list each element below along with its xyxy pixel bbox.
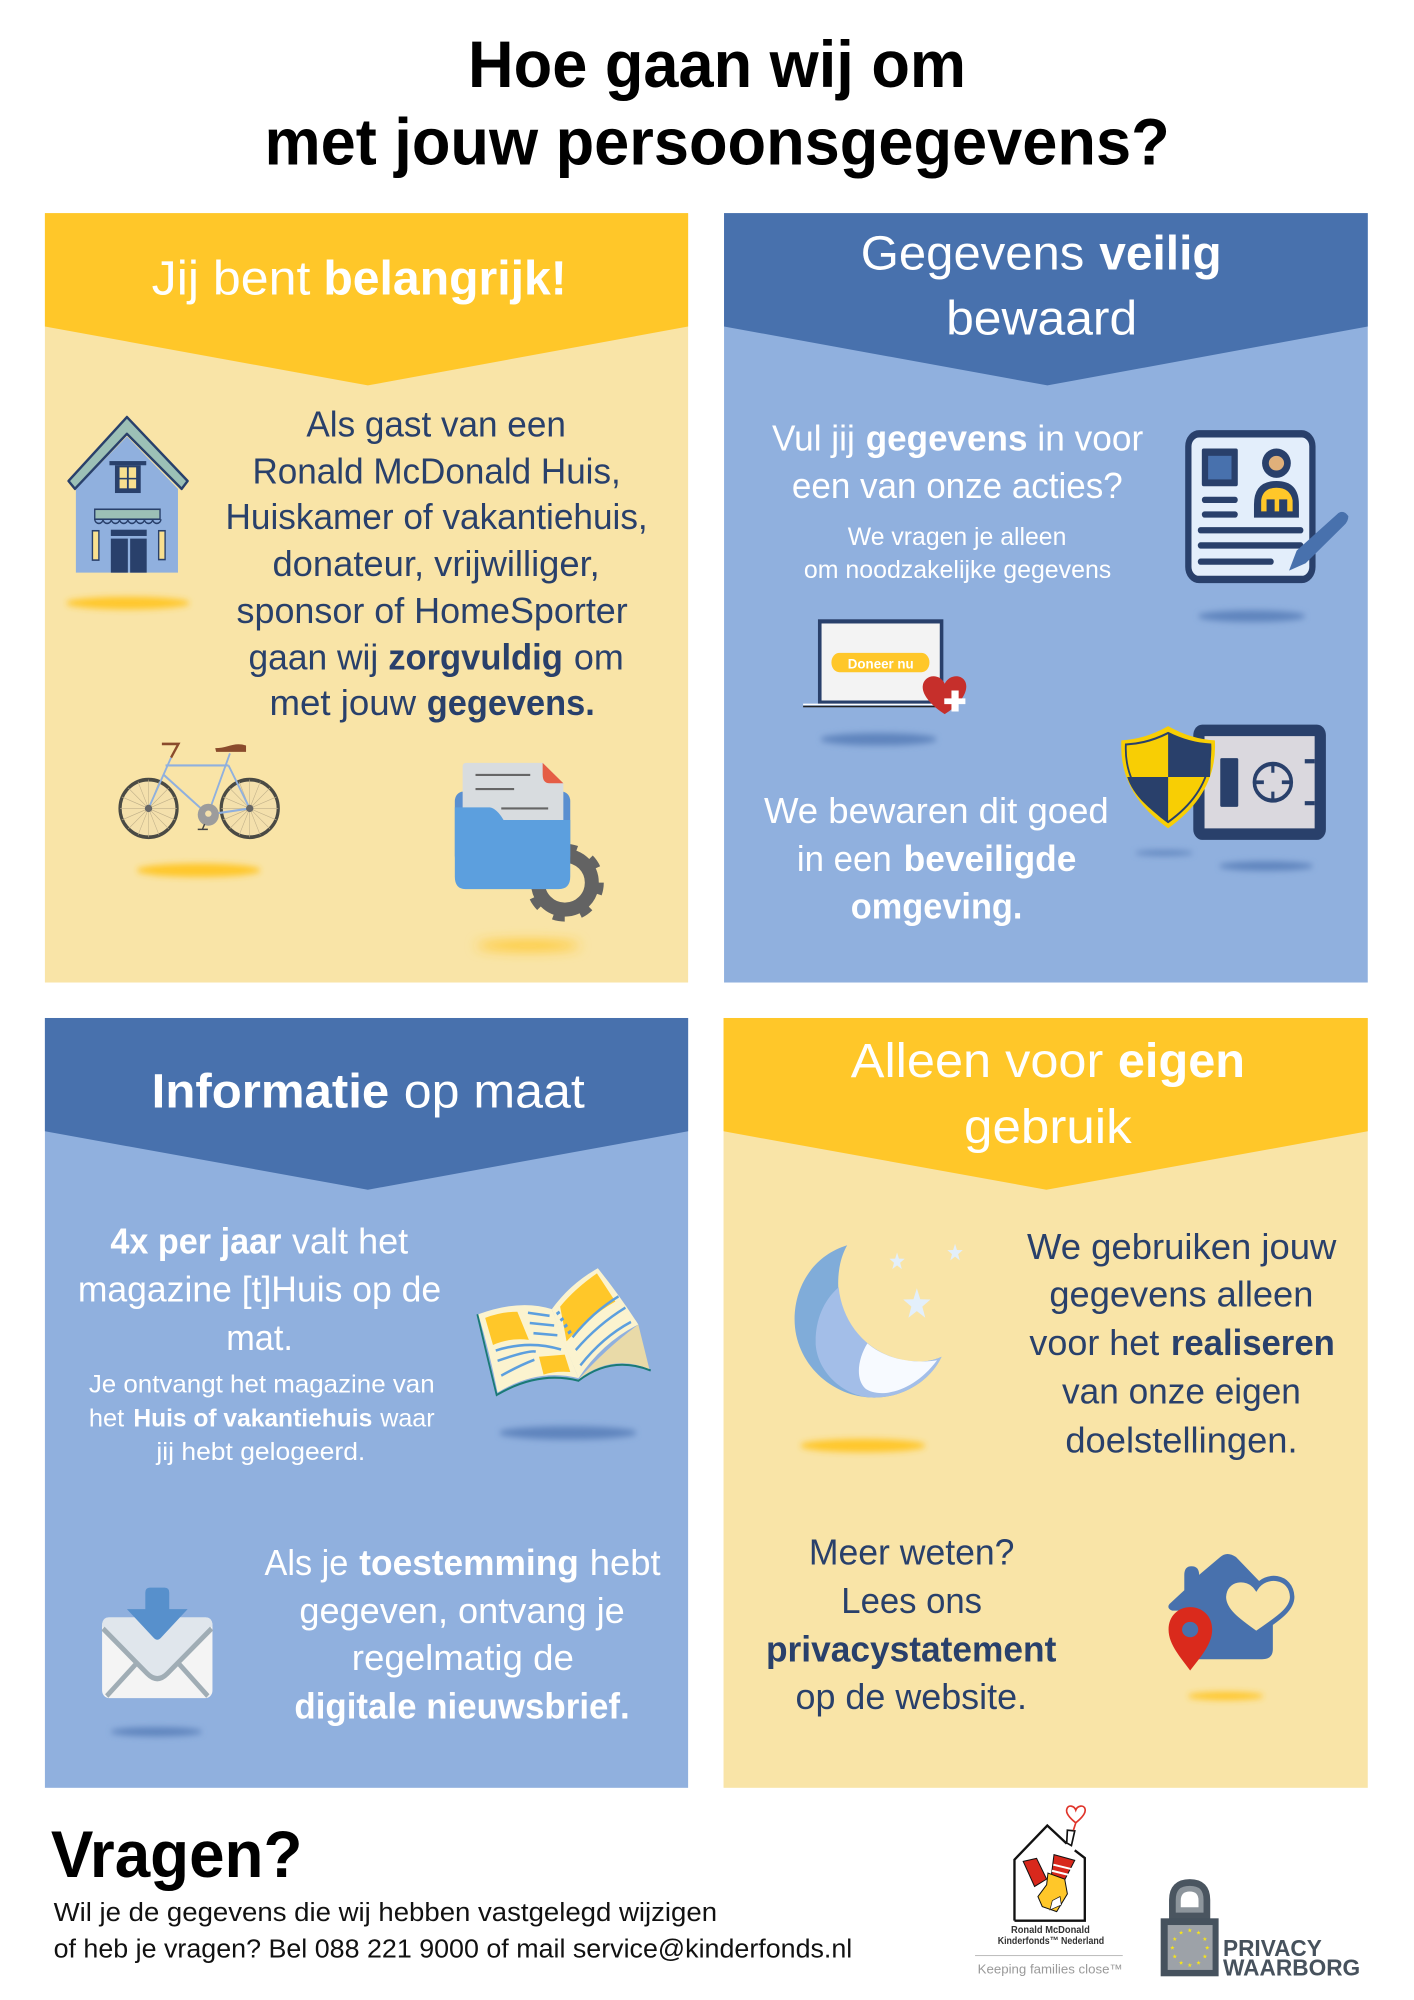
text block: privacystatement	[766, 1532, 1056, 1717]
heading: Alleen voor eigen gebruik: Alleen voor	[851, 1035, 1103, 1088]
button label: Doneer nu	[848, 656, 914, 671]
text block: introductie	[226, 403, 648, 723]
icon: shield and safe	[1121, 725, 1326, 871]
text block: contact	[54, 1899, 852, 1964]
icon: moon and stars	[795, 1244, 963, 1452]
text block: magazine: Je ontvangt het magazine van	[89, 1370, 435, 1398]
title: met jouw persoonsgegevens?	[264, 105, 1170, 179]
icon: bicycle	[120, 744, 278, 877]
text block: contact: Wil je de gegevens die wij hebben vastgelegd wijzigen	[54, 1899, 717, 1927]
heading: Alleen voor eigen gebruik	[851, 1035, 1245, 1154]
icon: folder with gear	[455, 763, 601, 951]
text block: nieuwsbrief: Als je	[264, 1542, 348, 1583]
text block: beveiligde omgeving: beveiligde	[904, 838, 1076, 879]
text block: introductie: gegevens.	[427, 682, 595, 723]
text block: magazine: magazine [t]Huis op de	[78, 1269, 441, 1310]
text block: beveiligde omgeving: omgeving.	[851, 886, 1022, 927]
text block: beveiligde omgeving: We bewaren dit goed	[764, 790, 1109, 831]
text block: contact: of heb je vragen? Bel 088 221 9000 of mail service@kinderfonds.nl	[54, 1936, 852, 1964]
text block: introductie: Ronald McDonald Huis,	[252, 450, 621, 491]
text block: doelstellingen: realiseren	[1171, 1322, 1335, 1363]
text block: nieuwsbrief: regelmatig de	[352, 1637, 574, 1678]
icon: house	[66, 417, 190, 609]
text block: introductie: Als gast van een	[306, 403, 566, 444]
logo: Privacy Waarborg: PRIVACY	[1223, 1935, 1322, 1961]
logo: Ronald McDonald Kinderfonds: Ronald McDonald	[1011, 1925, 1090, 1936]
text block: doelstellingen	[1027, 1226, 1337, 1460]
text block: privacystatement: op de website.	[796, 1676, 1027, 1717]
text block: magazine	[78, 1221, 441, 1466]
text block: beveiligde omgeving: in een	[797, 838, 892, 879]
text block: magazine: 4x per jaar	[110, 1221, 281, 1262]
text block: privacystatement: Lees ons	[841, 1580, 982, 1621]
text block: magazine: jij hebt gelogeerd.	[155, 1438, 365, 1466]
text block: introductie: gaan wij	[249, 636, 378, 677]
logo: Privacy Waarborg	[1161, 1882, 1360, 1981]
text block: magazine: mat.	[226, 1317, 293, 1358]
text block: introductie: donateur, vrijwilliger,	[272, 543, 600, 584]
text block: magazine: waar	[379, 1404, 435, 1432]
heading: Alleen voor eigen gebruik: eigen	[1118, 1035, 1245, 1088]
heading: Gegevens veilig bewaard: Gegevens	[861, 228, 1084, 281]
text block: gegevens invullen	[772, 417, 1143, 584]
panel: Informatie op maat	[45, 1018, 688, 1788]
text block: magazine: valt het	[292, 1221, 408, 1262]
title	[264, 27, 1170, 179]
text block: doelstellingen: gegevens alleen	[1049, 1274, 1313, 1315]
text block: gegevens invullen: We vragen je alleen	[848, 523, 1066, 551]
text block: introductie: Huiskamer of vakantiehuis,	[226, 496, 648, 537]
icon: envelope with arrow	[102, 1588, 212, 1736]
heading: Vragen: Vragen?	[51, 1817, 302, 1891]
text block: magazine: het	[89, 1404, 124, 1432]
text block: doelstellingen: van onze eigen	[1062, 1370, 1301, 1411]
text block: introductie: sponsor of HomeSporter	[237, 590, 628, 631]
text block: gegevens invullen: om noodzakelijke gegevens	[804, 556, 1111, 584]
heading: Gegevens veilig bewaard	[861, 228, 1222, 346]
logo: Ronald McDonald Kinderfonds: Keeping families close™	[978, 1962, 1123, 1977]
text block: introductie: om	[574, 636, 624, 677]
icon: home with heart and pin	[1168, 1554, 1292, 1700]
title: Hoe gaan wij om	[468, 27, 966, 101]
heading: Gegevens veilig bewaard: bewaard	[946, 292, 1137, 346]
text block: privacystatement: privacystatement	[766, 1629, 1056, 1670]
text block: nieuwsbrief	[264, 1542, 661, 1726]
icon: open magazine	[477, 1268, 651, 1439]
heading: Gegevens veilig bewaard: veilig	[1099, 228, 1222, 281]
text block: nieuwsbrief: toestemming	[359, 1542, 579, 1583]
heading: Informatie op maat: op maat	[404, 1065, 585, 1118]
panel: Alleen voor eigen gebruik	[724, 1018, 1368, 1788]
logo: Ronald McDonald Kinderfonds	[975, 1806, 1123, 1977]
text block: doelstellingen: doelstellingen.	[1065, 1419, 1298, 1460]
text block: beveiligde omgeving	[764, 790, 1109, 927]
text block: nieuwsbrief: hebt	[590, 1542, 661, 1583]
text block: privacystatement: Meer weten?	[809, 1532, 1014, 1573]
text block: introductie: zorgvuldig	[388, 636, 563, 677]
text block: doelstellingen: voor het	[1029, 1322, 1159, 1363]
heading: Jij bent belangrijk: Jij bent	[152, 253, 310, 306]
text block: nieuwsbrief: gegeven, ontvang je	[299, 1590, 625, 1631]
logo: Privacy Waarborg: WAARBORG	[1223, 1955, 1360, 1981]
text block: introductie: met jouw	[269, 682, 417, 723]
heading: Informatie op maat: Informatie	[152, 1065, 389, 1118]
panel: Gegevens veilig bewaard	[724, 213, 1368, 983]
text block: gegevens invullen: een van onze acties?	[792, 465, 1123, 506]
heading: Jij bent belangrijk: belangrijk!	[323, 253, 567, 306]
icon: laptop with donate button	[803, 621, 966, 746]
panel: Jij bent belangrijk	[45, 213, 688, 983]
text block: gegevens invullen: Vul jij	[772, 417, 855, 458]
text block: nieuwsbrief: digitale nieuwsbrief.	[294, 1685, 630, 1726]
text block: gegevens invullen: in voor	[1037, 417, 1143, 458]
heading: Alleen voor eigen gebruik: gebruik	[964, 1101, 1133, 1154]
text block: gegevens invullen: gegevens	[866, 417, 1027, 458]
logo: Ronald McDonald Kinderfonds: Kinderfonds™ Nederland	[998, 1936, 1104, 1947]
text block: doelstellingen: We gebruiken jouw	[1027, 1226, 1337, 1267]
icon: form with pen	[1188, 434, 1348, 622]
text block: magazine: Huis of vakantiehuis	[133, 1404, 372, 1432]
